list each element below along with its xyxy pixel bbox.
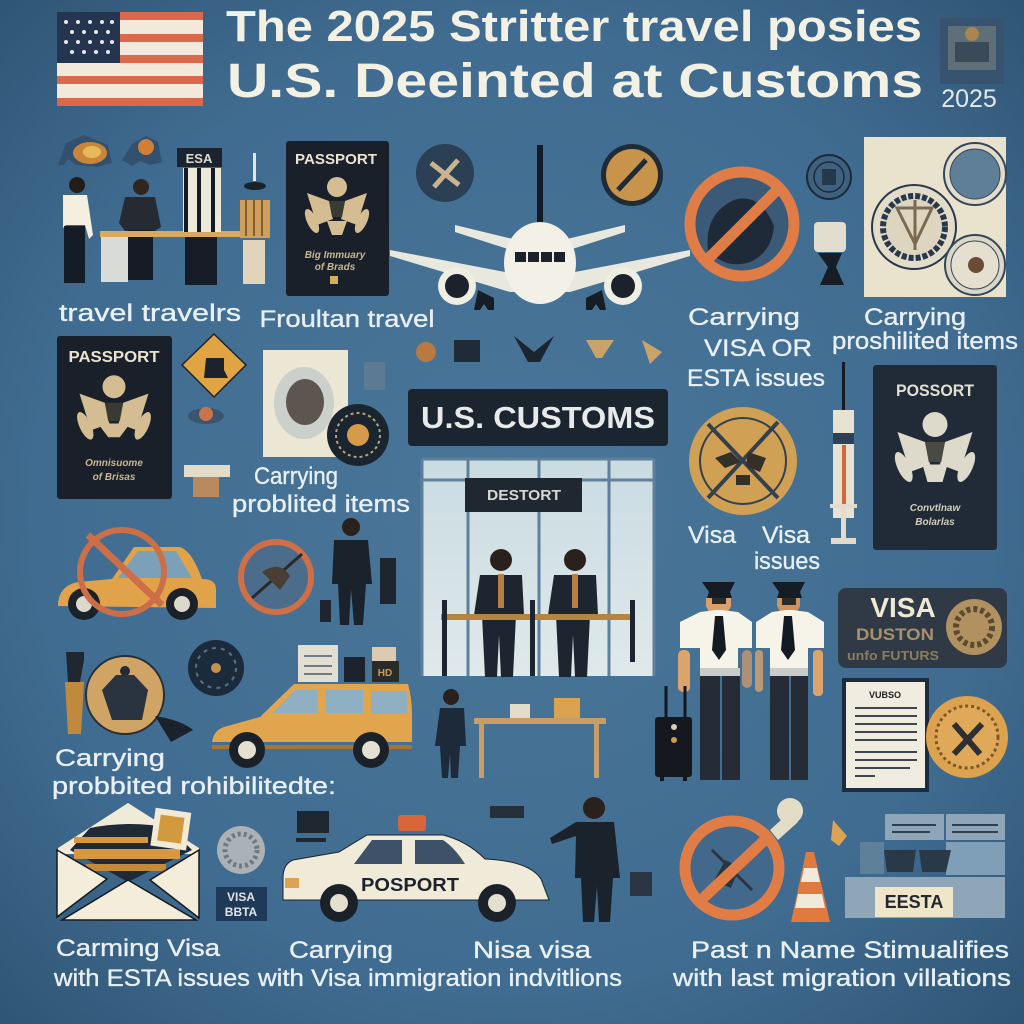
taxi crossed xyxy=(58,530,216,620)
label: Froultan travel: Froultan travel xyxy=(260,306,434,333)
label: Visa Visa issues: Visa xyxy=(762,522,811,549)
document with seals xyxy=(864,137,1006,297)
badge: 2025 xyxy=(940,18,1004,113)
round icon top xyxy=(416,144,474,202)
label: Carrying with visa immigration: with Visa immigration indvitlions xyxy=(257,965,622,992)
label: Carrying prohibited items center left: problited items xyxy=(232,491,410,518)
police car xyxy=(283,811,549,922)
bottom labels xyxy=(53,935,1011,992)
passport right: POSSORT xyxy=(896,381,975,400)
icon: crossed gold circle xyxy=(689,407,797,515)
label: Carrying with visa immigration xyxy=(257,937,622,992)
customs booth xyxy=(422,459,654,677)
badge: 2025: 2025 xyxy=(941,85,997,113)
passport top: PASSPORT xyxy=(295,151,377,168)
ESTA documents xyxy=(831,814,1005,918)
label: travel travels: travel travelrs xyxy=(59,300,241,327)
passport right: Convtlnaw xyxy=(910,503,961,514)
round stamp and visa tag: BBTA xyxy=(225,905,258,919)
label: Carrying prohibited: probbited rohibilitedte: xyxy=(52,773,336,800)
icon: syringe xyxy=(830,362,857,544)
label: Carrying Visa with ESTA issues: with ESTA issues xyxy=(53,965,250,992)
label: Carrying prohibited items center left xyxy=(232,463,410,518)
label: Nisa visa: Nisa visa xyxy=(473,937,592,964)
label: Visa Visa issues: issues xyxy=(754,548,820,575)
passport top xyxy=(286,141,389,296)
label: Carrying Visa or ESTA issues: Carrying xyxy=(688,304,800,331)
round stamp and visa tag xyxy=(216,826,267,921)
passport left: Omnisuome xyxy=(85,458,143,469)
label: Carrying prohibited xyxy=(52,745,336,800)
title xyxy=(226,2,923,108)
visa card: unfo FUTURS xyxy=(847,648,939,663)
passport right: Bolarlas xyxy=(915,517,955,528)
label: Past name similarities xyxy=(672,937,1011,992)
label: Carrying Visa with ESTA issues: Carming Visa xyxy=(56,935,221,962)
ESTA documents: EESTA xyxy=(885,892,943,912)
photo card with round seal xyxy=(263,350,389,466)
label: Carrying prohibited items: Carrying xyxy=(864,304,966,331)
envelope xyxy=(57,803,199,920)
label: Carrying Visa or ESTA issues: ESTA issues xyxy=(687,365,825,392)
banner: U.S. customs: U.S. CUSTOMS xyxy=(421,400,655,435)
passport left xyxy=(57,336,172,499)
figure at table xyxy=(435,689,606,778)
label: Carrying Visa or ESTA issues: VISA OR xyxy=(704,335,812,362)
label: Past name similarities: with last migration villations xyxy=(672,965,1011,992)
small icon row xyxy=(416,336,662,364)
title: U.S. Deeinted at Customs xyxy=(227,55,923,108)
visa card: DUSTON xyxy=(856,625,934,644)
banner: U.S. customs xyxy=(408,389,668,446)
label: Carrying prohibited: Carrying xyxy=(55,745,165,772)
police car: POSPORT xyxy=(361,875,459,895)
visa document: VUBSO xyxy=(869,690,901,700)
flag xyxy=(57,12,203,106)
label: Carrying Visa or ESTA issues xyxy=(687,304,825,392)
label: Carrying prohibited items: proshilited items xyxy=(832,328,1018,355)
suitcases on roof: HD xyxy=(378,668,392,679)
two officers xyxy=(655,582,824,781)
visa document xyxy=(844,680,927,790)
icon: round seal and figure xyxy=(807,155,851,285)
visa card: VISA xyxy=(870,592,936,623)
suitcases on roof xyxy=(298,645,399,682)
passport right xyxy=(873,365,997,550)
icon: gold badge xyxy=(601,144,663,206)
visa card xyxy=(838,588,1007,668)
label: Past name similarities: Past n Name Stimualifies xyxy=(691,937,1009,964)
label: Visa Visa issues xyxy=(688,522,820,575)
figure with suitcase xyxy=(332,518,396,625)
icon: no sign with object xyxy=(241,542,331,622)
icon: check-in desk with travellers xyxy=(58,135,270,285)
icon: warning sign and objects xyxy=(182,334,246,497)
passport left: of Brisas xyxy=(93,472,136,483)
no sign with cone xyxy=(685,798,830,922)
label: Carrying prohibited items center left: Carrying xyxy=(254,463,338,490)
taxi wagon xyxy=(212,684,412,768)
label: Carrying with visa immigration: Carrying xyxy=(289,937,393,964)
icon: check-in desk with travellers: ESA xyxy=(186,151,213,166)
round stamp and visa tag: VISA xyxy=(227,890,255,904)
passport top: of Brads xyxy=(315,262,356,273)
round icon and tool xyxy=(65,640,244,742)
customs booth: DESTORT xyxy=(487,487,561,504)
label: Visa Visa issues: Visa xyxy=(688,522,737,549)
icon: no sign large xyxy=(690,172,794,276)
passport top: Big Immuary xyxy=(305,250,366,261)
airplane xyxy=(390,145,690,310)
passport left: PASSPORT xyxy=(68,349,160,366)
gold seal xyxy=(926,696,1008,778)
title: The 2025 Stritter travel posies xyxy=(226,2,922,51)
label: Carrying prohibited items xyxy=(832,304,1018,355)
label: Carrying Visa with ESTA issues xyxy=(53,935,250,992)
officer with small icons xyxy=(490,797,652,922)
